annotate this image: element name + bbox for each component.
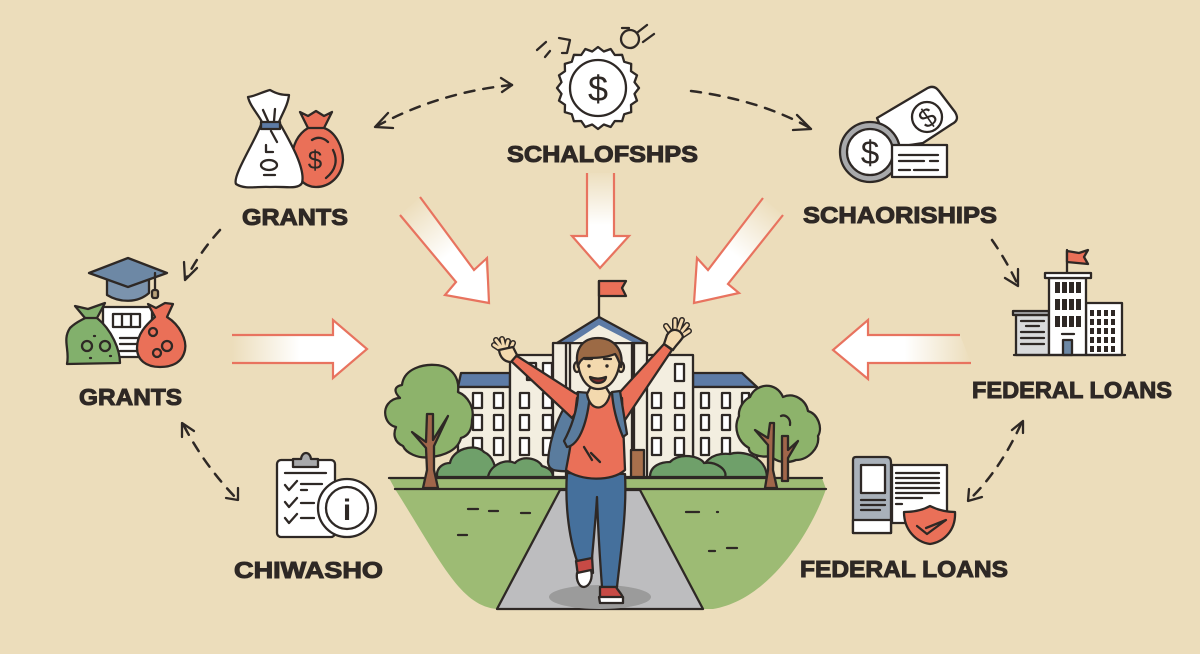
icon: dollar seal [537,25,654,129]
arrow: top-left into centre [400,197,489,303]
icon: dollar seal: $ [588,68,608,109]
grass ticks and path [458,490,737,609]
node: grants top [236,90,348,230]
flag [599,281,626,317]
icon: coin and cheque [840,87,957,182]
tree: left [385,365,473,488]
neck [587,384,610,408]
label: chiwasho: CHIWASHO [234,557,383,583]
label: federal loans right: FEDERAL LOANS [972,377,1172,403]
jeans [566,473,625,587]
label: scholarships: SCHALOFSHPS [507,141,698,167]
dashed arrow: scholarships to building [992,240,1018,286]
icon: clipboard and info coin: i [343,494,351,527]
lawn [389,478,826,609]
bushes [437,448,767,477]
label: federal loans bottom: FEDERAL LOANS [800,556,1008,582]
head [574,338,624,389]
shirt folds [584,447,600,462]
arrow: top-right into centre [694,198,783,303]
hand: left [494,339,517,362]
icon: book and shield [853,457,955,544]
front shoe [599,587,623,603]
back shoe [576,556,593,587]
node: scholarships right [803,87,997,228]
arrow: left into centre [232,320,367,378]
tree: right [736,386,820,488]
illustration: student at campus [385,281,826,609]
hand: right [664,320,689,350]
icon: cap, document and bags [66,258,185,367]
dashed arrow: federal loans pair [968,421,1023,501]
right arm [610,344,672,420]
dashed arrow: grants to left grants [184,230,220,280]
node: checklist [234,453,383,583]
left arm [510,356,586,418]
node: federal loans right [972,250,1172,403]
icon: coin and cheque: $ [861,134,879,171]
label: grants: GRANTS [242,204,348,230]
torso [566,393,625,479]
node: grants left [66,258,185,410]
icon: clipboard and info coin [277,453,376,537]
dashed arrow: scholarships to scholarships right [691,91,811,130]
icon: government building [1013,250,1125,355]
dashed arrow: scholarships to grants [375,78,512,128]
building [458,317,757,477]
ground shadow [549,585,651,609]
backpack [548,392,578,472]
label: grants left: GRANTS [79,384,182,410]
node: federal loans bottom [800,457,1008,582]
student [494,320,689,603]
arrow: top into centre [572,173,629,268]
icon: money bags: $ [308,145,323,175]
label: scholarships right: SCHAORISHIPS [803,202,997,228]
straps [564,391,627,447]
icon: coin and cheque: $ [913,101,942,134]
node: scholarships top [507,25,698,167]
dashed arrow: left grants to checklist [182,423,238,500]
arrow: right into centre [833,320,971,379]
